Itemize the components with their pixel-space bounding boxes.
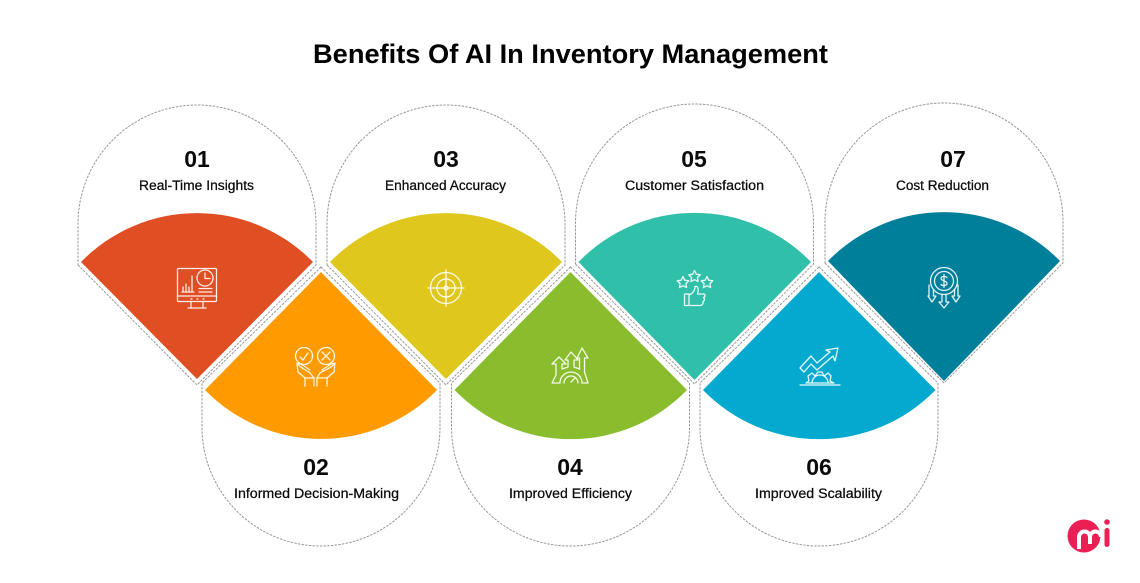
title: Benefits Of AI In Inventory Management	[313, 39, 828, 69]
panel: 02 Informed Decision-Making	[202, 267, 440, 546]
icon: thumbs up with stars	[677, 270, 713, 306]
icon: hands holding check and cross	[296, 348, 335, 386]
panel: 03 Enhanced Accuracy: Enhanced Accuracy	[385, 178, 506, 193]
icon: arrows rising over gauge	[552, 348, 588, 383]
panel: 04 Improved Efficiency: Improved Efficiency	[509, 486, 632, 501]
panel: 01 Real-Time Insights: 01	[184, 146, 210, 172]
panel: 04 Improved Efficiency	[452, 267, 690, 546]
panel: 03 Enhanced Accuracy: 03	[433, 146, 459, 172]
panel: 03 Enhanced Accuracy	[327, 105, 565, 385]
panel: 07 Cost Reduction	[825, 103, 1063, 383]
panel: 06 Improved Scalability: 06	[806, 454, 832, 480]
panel: 05 Customer Satisfaction: 05	[681, 146, 707, 172]
panel: 07 Cost Reduction: 07	[940, 146, 966, 172]
panel: 01 Real-Time Insights	[78, 105, 316, 385]
icon: monitor with chart and clock	[178, 268, 216, 308]
panel: 02 Informed Decision-Making: Informed Decision-Making	[234, 486, 399, 501]
logo	[1068, 519, 1110, 552]
icon: coin with falling arrows	[928, 268, 960, 308]
panel: 04 Improved Efficiency: 04	[557, 454, 583, 480]
panel: 06 Improved Scalability	[700, 267, 938, 546]
panel: 05 Customer Satisfaction	[576, 104, 814, 384]
panel: 07 Cost Reduction: Cost Reduction	[896, 178, 989, 193]
panel: 06 Improved Scalability: Improved Scalability	[755, 486, 882, 501]
panel: 01 Real-Time Insights: Real-Time Insights	[139, 178, 254, 193]
panel: 02 Informed Decision-Making: 02	[303, 454, 329, 480]
panel: 05 Customer Satisfaction: Customer Satisfaction	[625, 178, 764, 193]
icon: rising arrow over gear	[800, 348, 840, 385]
icon: target crosshair	[428, 270, 464, 306]
